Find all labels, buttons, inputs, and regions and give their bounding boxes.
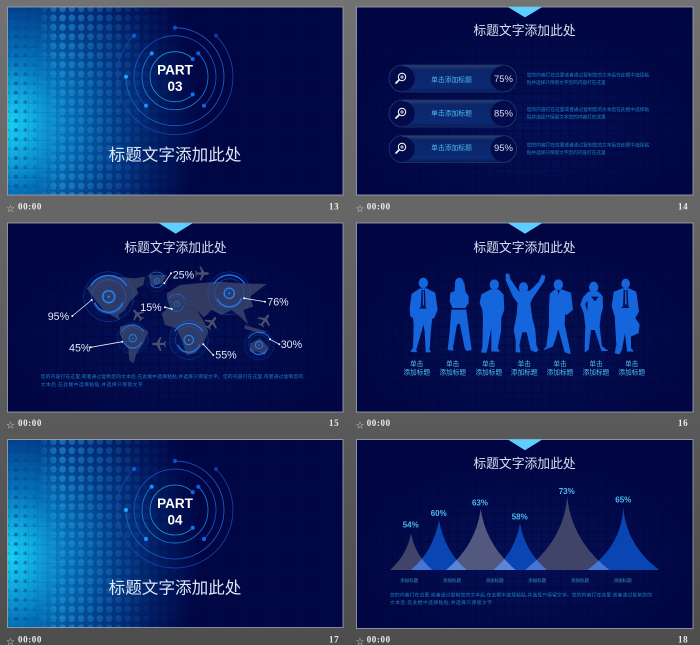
person labels: 添加标题 [475,368,502,376]
person labels: 添加标题 [583,368,610,376]
footer: page number: 15 [329,418,339,428]
person labels: 单击 [482,359,496,368]
row 85%: 85% [494,108,514,120]
percentage labels: 55% [215,349,237,361]
description [41,373,303,388]
footer: time [6,634,42,645]
person 1 to 3 [410,278,504,353]
person labels: 添加标题 [511,368,538,376]
description: 文本后,在此框中选择粘贴,并选择只保留文字 [390,599,492,606]
person labels: 添加标题 [403,368,430,376]
target rings [84,270,274,360]
planes [128,266,275,351]
percentage labels: 15% [140,302,162,314]
leader lines [71,272,280,356]
person 4 [506,274,545,352]
peak percentages: 65% [615,496,631,504]
footer: page number: 16 [678,418,688,428]
percentage labels: 30% [281,339,303,351]
footer: time: 00:00 [367,202,391,212]
percentage labels: 45% [69,342,91,354]
title: 标题文字添加此处 [473,456,576,471]
peak percentages: 73% [559,487,575,496]
footer: time: ☆ [6,204,15,215]
description 2 [527,106,649,120]
percentage labels [48,270,303,361]
person labels: 单击 [446,359,460,368]
marker triangle [508,223,542,234]
row 95%: 单击添加标题 [431,143,472,152]
panel: slide 18 peak chart [356,440,693,645]
row 85%: 单击添加标题 [431,108,472,118]
peak percentages: 54% [403,520,419,530]
person labels: 单击 [589,359,603,368]
description 2: 贴并选择只保留文字您的内容打在这里 [527,114,606,120]
title: 标题文字添加此处 [124,240,227,255]
footer: time: 00:00 [18,418,42,428]
footer: time: 00:00 [18,202,42,212]
row 95% [389,136,516,162]
description 2: 您的内容打在这里或者通过复制您的文本后在此框中选择粘 [527,106,649,113]
heading: PART 03: PART [157,62,194,78]
footer: time: 00:00 [367,634,391,644]
heading: PART 04: 04 [167,512,183,528]
world map [87,275,268,363]
footer: page number: 14 [678,202,688,212]
panel: slide 16 people silhouettes [356,223,693,432]
peak percentages: 58% [512,512,528,522]
panel: slide 13 section PART 03 [6,7,343,215]
person labels: 添加标题 [547,368,574,376]
percentage labels: 95% [48,311,70,323]
row 75%: 75% [494,74,514,85]
footer: time [356,418,391,432]
footer: time [6,418,42,432]
peak labels: 添加标题 [486,577,504,584]
peak percentages: 60% [431,509,447,518]
peak labels: 添加标题 [400,577,419,584]
person labels: 单击 [553,359,567,368]
row 85% [389,100,516,127]
heading: PART 04 [157,496,194,528]
peak labels: 添加标题 [571,577,589,584]
marker triangle [508,440,542,450]
marker triangle [158,223,193,234]
person labels: 添加标题 [618,368,645,376]
peak labels: 添加标题 [614,577,632,584]
row 75%: 单击添加标题 [431,75,472,84]
description: 文本后,在此框中选择粘贴,并选择只保留文字 [41,381,143,388]
description 3: 贴并选择只保留文字您的内容打在这里 [527,149,606,156]
footer: time: 00:00 [18,634,42,644]
row 75% [389,65,516,92]
person labels: 单击 [625,359,639,368]
heading: PART 04: PART [157,496,194,511]
peak percentages [403,487,631,530]
footer: time [356,634,391,645]
description 3 [527,142,649,156]
description [390,592,652,606]
person 5 to 7 [544,279,639,354]
percentage labels: 76% [267,296,289,308]
footer: page number: 18 [678,634,688,644]
peak chart [390,496,659,570]
percentage labels: 25% [173,270,195,282]
peak labels: 添加标题 [443,577,461,584]
title: 标题文字添加此处 [473,240,576,255]
footer: time: 00:00 [367,418,391,428]
peak labels [400,577,632,584]
person labels [403,359,645,376]
row 95%: 95% [494,143,514,154]
panel: slide 14 three progress rows [356,7,693,215]
title: 标题文字添加此处 [473,23,576,38]
description 3: 您的内容打在这里或者通过复制您的文本后在此框中选择粘 [527,142,649,148]
person labels: 单击 [410,359,424,368]
heading: PART 03: 03 [167,79,183,94]
description 1: 您的内容打在这里或者通过复制您的文本后在此框中选择粘 [527,72,649,78]
footer: time: ☆ [6,420,15,432]
heading: PART 03 [157,62,194,94]
person labels: 添加标题 [439,368,466,376]
marker triangle [508,7,542,17]
description 1 [527,72,649,86]
description 1: 贴并选择只保留文字您的内容打在这里 [527,79,606,86]
footer: time: ☆ [356,204,364,215]
icon: concentric orbit rings [117,459,233,568]
panel: slide 17 section PART 04 [6,440,343,645]
title: 标题文字添加此处 [109,578,241,598]
footer: page number: 17 [329,634,339,644]
icon: concentric orbit rings [117,26,233,135]
footer: time [356,202,391,215]
peak percentages: 63% [472,498,488,508]
footer: time: ☆ [356,420,364,432]
description: 您的内容打在这里,或者通过复制您的文本后,在此框中选择粘贴,并选择只保留文字。您的内容打在这里,或者通过复制您的 [41,373,303,380]
panel: slide 15 world map [6,223,343,432]
title: 标题文字添加此处 [109,146,241,164]
footer: time [6,202,42,215]
footer: page number: 13 [329,202,339,212]
description: 您的内容打在这里,或者通过复制您的文本后,在此框中选择粘贴,并选择只保留文字。您的内容打在这里,或者通过复制您的 [390,592,652,598]
person labels: 单击 [518,359,531,368]
peak labels: 添加标题 [528,577,547,584]
